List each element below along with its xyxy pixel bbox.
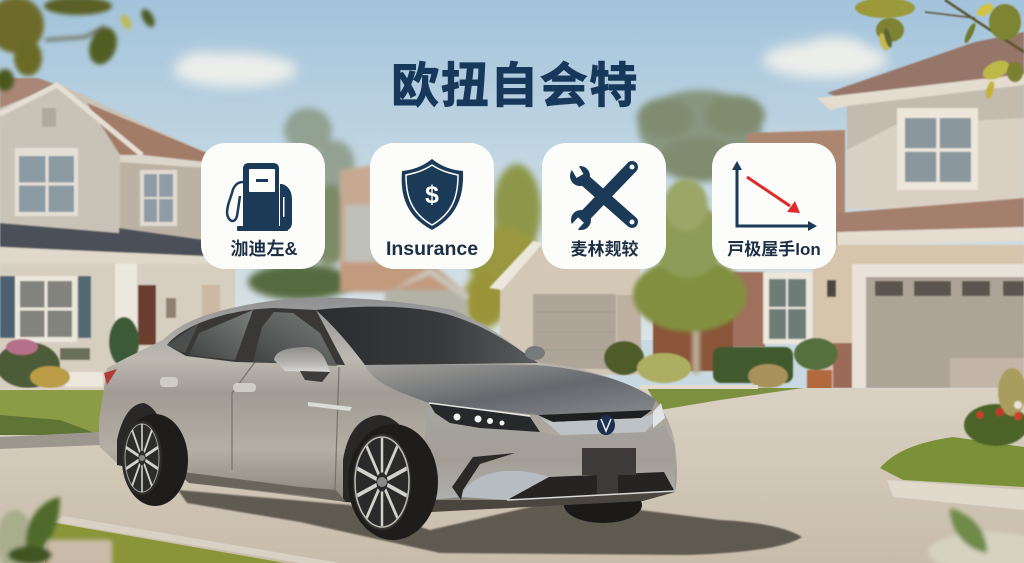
door handles [160, 377, 256, 392]
front bumper [423, 403, 675, 500]
lower bumper lip [429, 492, 675, 512]
lip chrome line [507, 491, 675, 500]
car [99, 298, 802, 555]
windshield [316, 307, 538, 365]
curb right [887, 480, 1024, 510]
headlight LEDs [454, 414, 504, 426]
lower grille [507, 472, 675, 500]
tail light [104, 369, 117, 385]
badge [597, 415, 615, 435]
foreground tree [633, 179, 747, 374]
headlight [429, 403, 540, 432]
flowers right [964, 368, 1024, 446]
background trees [248, 90, 765, 328]
lawn bottom left [45, 522, 285, 563]
door sill [175, 471, 346, 502]
front side window [253, 312, 337, 366]
front wheel [348, 424, 438, 540]
door shut lines [232, 362, 339, 490]
clouds [173, 37, 887, 87]
license plate [582, 448, 636, 495]
lawn bottom right [880, 437, 1024, 487]
card: insurance [370, 143, 494, 269]
upper grille [538, 410, 652, 422]
rear wheel [122, 414, 188, 506]
curb left [0, 432, 100, 449]
title: 欧扭自会特 [391, 60, 639, 113]
far mirror [525, 346, 545, 360]
right house [713, 32, 1024, 390]
side mirror [274, 347, 330, 382]
left air vent [452, 453, 515, 500]
silver lower panel [461, 471, 549, 500]
far front wheel [564, 487, 642, 523]
pillar and window surround [167, 308, 345, 365]
lawn right of car [647, 388, 803, 410]
card: depreciation [712, 143, 836, 269]
right headlight [653, 403, 665, 428]
curb behind lawn [640, 385, 758, 389]
card: maintenance [542, 143, 666, 269]
car shadow [178, 490, 802, 555]
driveway [0, 388, 1024, 563]
sky background [0, 0, 1024, 340]
side crease badge [308, 402, 352, 411]
rear wheel arch [117, 403, 174, 476]
card: fuel [201, 143, 325, 269]
lawn left [0, 390, 104, 435]
rear side window [189, 310, 253, 360]
headlight chrome line [429, 403, 530, 416]
car body [99, 298, 677, 512]
label: depreciation: 戸极屋手lon [727, 239, 821, 259]
foreground foliage top right [855, 0, 1024, 100]
distant house [340, 165, 470, 320]
icon: declining chart [732, 161, 817, 231]
chrome strip [541, 413, 656, 435]
middle house with garage [489, 241, 765, 383]
foreground foliage bottom left [0, 497, 112, 563]
foreground foliage top left [0, 0, 157, 91]
icon: crossed wrenches [570, 162, 634, 232]
icon: shield with dollar: $ [425, 181, 439, 209]
foreground foliage bottom right [928, 508, 1024, 563]
icon: fuel pump [227, 163, 292, 231]
quarter window [167, 323, 199, 353]
label: maintenance: 麦林觌较 [570, 239, 638, 259]
label: insurance: Insurance [386, 238, 478, 260]
left house [0, 78, 235, 389]
label: fuel: 泇迪左& [230, 239, 298, 259]
curb bottom left [55, 516, 340, 563]
front wheel arch [343, 415, 429, 505]
hood [365, 365, 656, 415]
